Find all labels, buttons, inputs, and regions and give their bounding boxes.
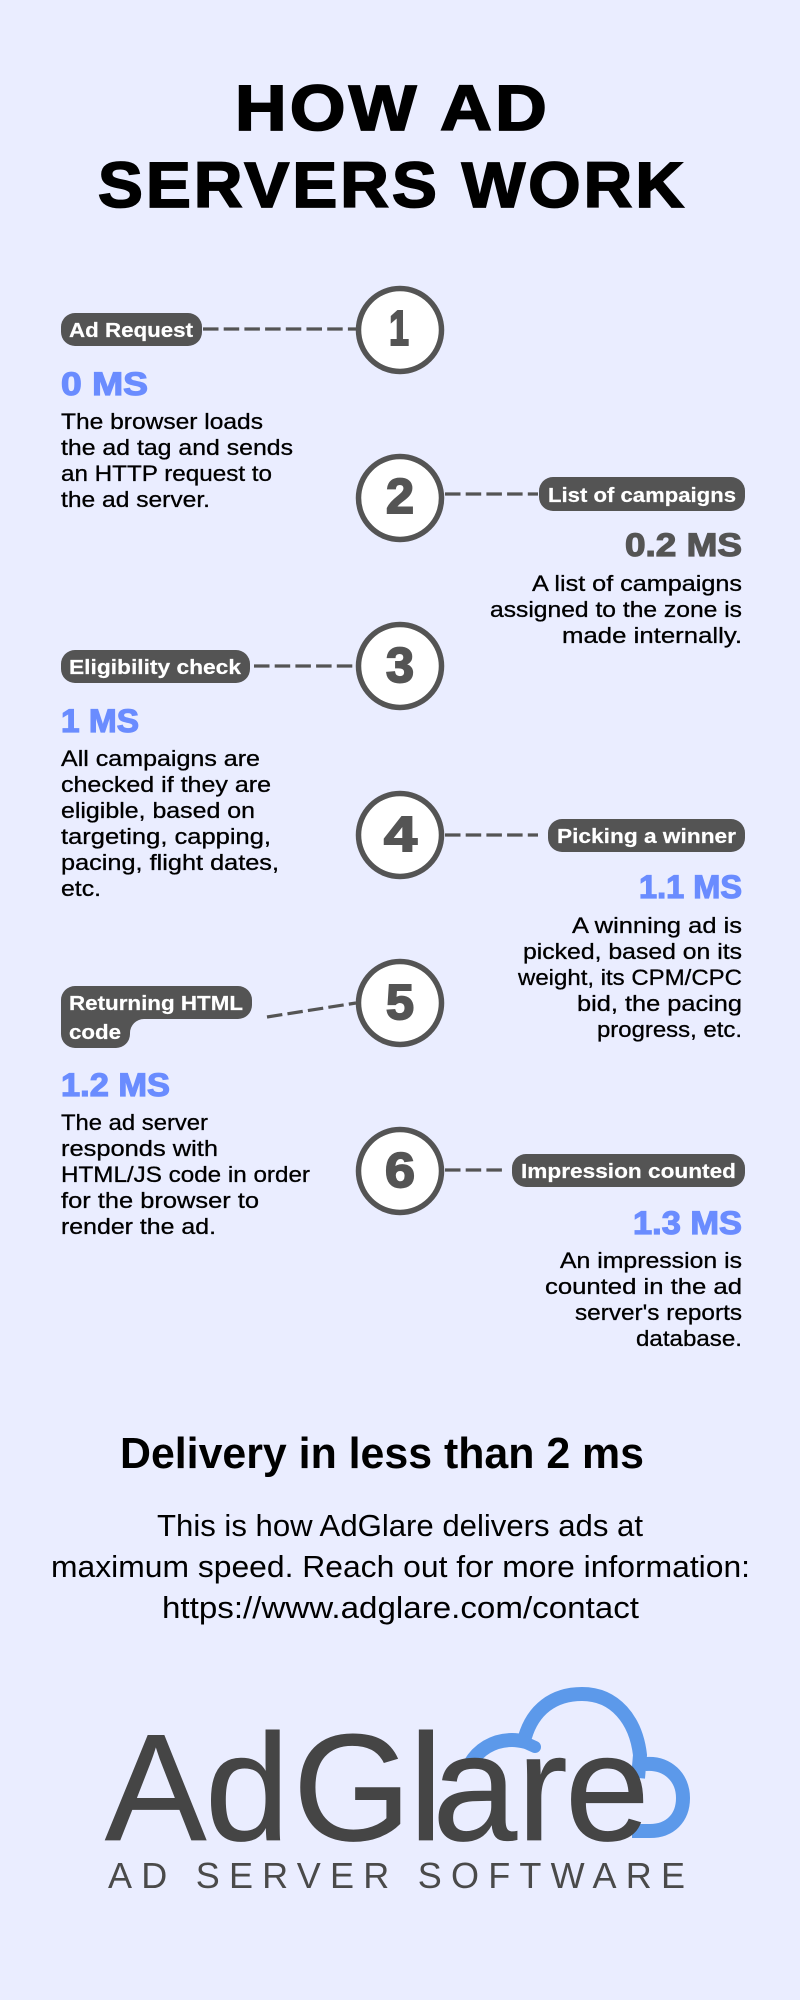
time 5: 1.2 MS [61,1067,170,1103]
label pill 2: List of campaigns [548,485,736,507]
connector 5 [267,1003,356,1017]
connector 6 [445,1168,505,1172]
description 2: assigned to the zone is [490,597,742,622]
description 1: the ad server. [61,487,210,512]
time 3: 1 MS [61,703,139,739]
description 3: targeting, capping, [61,824,271,849]
description 1 [61,409,293,512]
step 3: eligibility check [61,624,442,901]
time 1: 0 MS [61,366,148,402]
number badge 4 [358,794,442,876]
closing paragraph: maximum speed. Reach out for more information: [51,1549,750,1584]
step 4: picking a winner [358,794,745,1042]
time 2: 0.2 MS [625,527,742,563]
label pill 3: Eligibility check [69,657,242,679]
number badge 3: 3 [386,639,414,693]
label pill 3 [61,650,250,683]
number badge 2: 2 [386,470,414,524]
label pill 5: code [69,1022,121,1044]
connector 3 [254,664,356,668]
time 4: 1.1 MS [639,869,742,905]
label pill 1: Ad Request [69,320,193,342]
number badge 5 [358,962,442,1044]
description 3: etc. [61,876,101,901]
description 4: progress, etc. [597,1017,742,1042]
description 6: server's reports [575,1300,742,1325]
description 3: All campaigns are [61,746,260,771]
description 3: checked if they are [61,772,271,797]
number badge 4: 4 [384,808,417,862]
number badge 1: 1 [389,302,409,356]
label pill 6 [512,1154,745,1187]
description 1: The browser loads [61,409,263,434]
description 4: A winning ad is [572,913,742,938]
icon: cloud [470,1694,683,1831]
description 6: counted in the ad [545,1274,742,1299]
description 5: for the browser to [61,1188,259,1213]
description 3: pacing, flight dates, [61,850,279,875]
label pill 5 [61,986,252,1048]
label pill 4 [548,819,745,852]
number badge 6: 6 [385,1144,415,1198]
step 1: ad request [61,288,442,512]
description 5: The ad server [61,1110,208,1135]
description 5: render the ad. [61,1214,216,1239]
wordmark: AdGlare [105,1703,650,1873]
connector 4 [445,833,538,837]
tagline: AD SERVER SOFTWARE [108,1855,685,1896]
connector 1 [203,327,356,331]
closing heading: Delivery in less than 2 ms [120,1429,644,1478]
logo: AdGlare [105,1694,685,1896]
connector 2 [445,492,538,496]
description 2: A list of campaigns [532,571,742,596]
closing paragraph [51,1508,750,1625]
description 3 [61,746,279,901]
description 1: the ad tag and sends [61,435,293,460]
title [98,72,687,221]
number badge 5: 5 [386,976,414,1030]
step 2: list of campaigns [358,456,745,648]
title: SERVERS WORK [98,149,687,221]
number badge 6 [358,1130,442,1212]
description 4: picked, based on its [523,939,742,964]
label pill 1 [61,313,202,346]
description 3: eligible, based on [61,798,255,823]
description 2: made internally. [562,623,742,648]
closing paragraph: https://www.adglare.com/contact [162,1590,639,1625]
description 6 [545,1248,742,1351]
description 2 [490,571,742,648]
description 5 [61,1110,310,1239]
closing paragraph: This is how AdGlare delivers ads at [157,1508,643,1543]
description 6: An impression is [560,1248,742,1273]
step 5: returning html code [61,962,442,1239]
description 4 [517,913,742,1042]
description 5: responds with [61,1136,218,1161]
description 4: weight, its CPM/CPC [517,965,742,990]
label pill 5: Returning HTML [69,993,243,1015]
label pill 4: Picking a winner [557,826,736,848]
time 6: 1.3 MS [633,1205,742,1241]
label pill 6: Impression counted [521,1161,736,1183]
description 6: database. [636,1326,742,1351]
description 4: bid, the pacing [577,991,742,1016]
description 1: an HTTP request to [61,461,272,486]
number badge 2 [358,456,442,540]
description 5: HTML/JS code in order [61,1162,310,1187]
number badge 1 [358,288,442,372]
title: HOW AD [235,72,550,144]
label pill 2 [539,477,745,511]
step 6: impression counted [358,1130,745,1351]
number badge 3 [358,624,442,708]
